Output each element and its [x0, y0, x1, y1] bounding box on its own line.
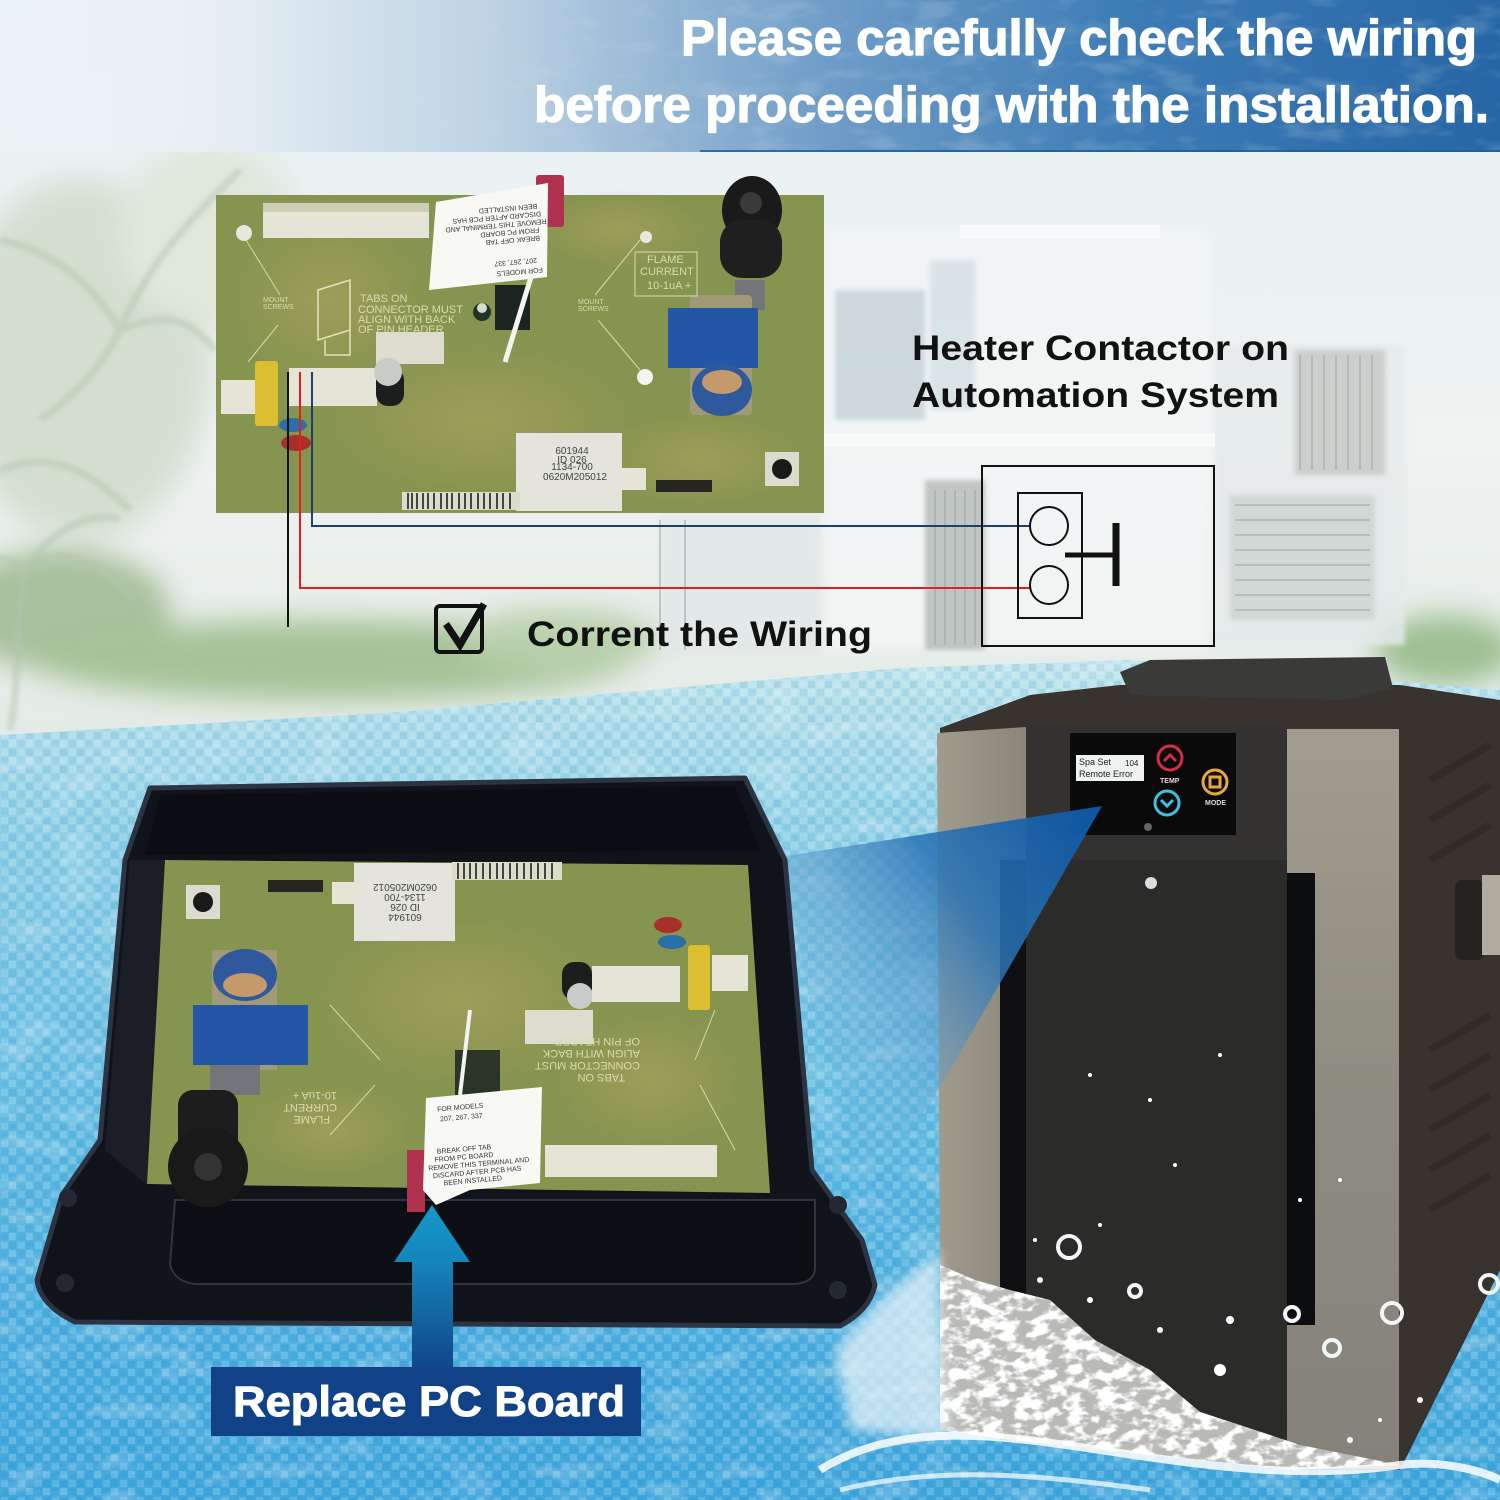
- left silver panel: [937, 727, 1026, 1300]
- tag lower: BREAK OFF TAB: [437, 1144, 492, 1156]
- small capacitors: [473, 285, 530, 330]
- side connector: [1455, 875, 1500, 960]
- screw posts: [56, 1189, 847, 1299]
- tag lower: 207, 267, 337: [440, 1113, 483, 1123]
- sticker lower: ID 026: [390, 901, 420, 912]
- wire lower: [460, 1010, 470, 1095]
- button labels: TEMP: [1160, 778, 1180, 785]
- paper tag: 207, 267, 337: [494, 256, 537, 267]
- label box: replace pc board: [211, 1367, 641, 1436]
- lower board printed text: CURRENT: [283, 1101, 337, 1113]
- paper tag: BEEN INSTALLED: [478, 202, 537, 214]
- control bezel: [1026, 726, 1287, 862]
- sticker: 0620M205012: [543, 472, 607, 483]
- blue and red capacitors: [279, 418, 311, 451]
- droplets: [1033, 1053, 1423, 1443]
- lower board printed text: 10-1uA +: [293, 1089, 337, 1101]
- background: sky: [0, 0, 1500, 740]
- fuse lower: [688, 945, 710, 1010]
- background: swimming pool: [0, 660, 1500, 1500]
- lower board printed text: TABS ON: [577, 1071, 625, 1083]
- pin header connectors: [221, 332, 444, 414]
- red tab: [536, 175, 564, 227]
- mount guide lines lower: [330, 1005, 735, 1150]
- tag lower: FOR MODELS: [437, 1103, 484, 1114]
- board printed text: ALIGN WITH BACK: [358, 314, 456, 326]
- recess: [170, 1200, 815, 1284]
- board printed text: SCREWS: [578, 306, 609, 313]
- title: Please carefully check the wiring: [681, 10, 1477, 66]
- door: [1000, 860, 1287, 1440]
- arrow: [394, 1205, 470, 1375]
- lower board printed text: ALIGN WITH BACK: [542, 1047, 640, 1059]
- right silver frame: [1287, 729, 1399, 1469]
- icon: checkbox: [436, 604, 484, 652]
- barcode: [402, 492, 520, 510]
- board printed text: FLAME: [647, 254, 684, 266]
- lower board: [147, 860, 770, 1193]
- background: villa: [660, 230, 1405, 655]
- connectors lower: [525, 955, 748, 1177]
- barcode lower: [452, 862, 562, 880]
- lower board printed text: [283, 1035, 640, 1125]
- pin row lower: [268, 880, 323, 892]
- main capacitor: [374, 358, 404, 406]
- body: [940, 685, 1500, 1470]
- small connector lower: [332, 882, 354, 904]
- vents: [1430, 745, 1490, 1210]
- capacitor lower: [562, 962, 593, 1009]
- heading: heater contactor: Automation System: [912, 376, 1279, 415]
- water splash: [820, 1053, 1500, 1490]
- pin row: [656, 480, 712, 492]
- sticker: 1134-700: [551, 462, 593, 473]
- display: [1076, 755, 1144, 781]
- board printed text: TABS ON: [360, 293, 408, 305]
- tag lower: BEEN INSTALLED: [443, 1175, 502, 1187]
- red and blue parts lower: [654, 917, 686, 949]
- red tab lower: [407, 1150, 425, 1212]
- paper tag: FROM PC BOARD: [480, 226, 540, 238]
- paper tag: FOR MODELS: [496, 266, 543, 277]
- wire: [505, 277, 531, 362]
- push button: [765, 452, 799, 486]
- fuse: [255, 361, 278, 426]
- small components lower: [455, 1050, 500, 1095]
- board printed text: OF PIN HEADER: [358, 324, 444, 336]
- panel: lower PC board housing: [37, 778, 875, 1326]
- board printed text: SCREWS: [263, 304, 294, 311]
- tag lower: DISCARD AFTER PCB HAS: [433, 1165, 522, 1180]
- small connector: [622, 468, 646, 490]
- tag lower: [423, 1087, 542, 1205]
- board printed text: CONNECTOR MUST: [358, 304, 463, 316]
- sticker lower: 1134-700: [384, 891, 426, 902]
- contactor diagram: [982, 466, 1214, 646]
- button labels: MODE: [1205, 800, 1226, 807]
- banner: [158, 0, 1500, 152]
- lid: [1120, 657, 1393, 700]
- lower board printed text: FLAME: [293, 1113, 330, 1125]
- board printed text: MOUNT: [263, 297, 289, 304]
- label box: replace pc board: Replace PC Board: [233, 1378, 625, 1426]
- title: before proceeding with the installation.: [534, 77, 1489, 133]
- transformer: [668, 280, 765, 416]
- transformer lower: [193, 949, 308, 1095]
- board printed text: [263, 254, 694, 336]
- sticker lower: 601944: [388, 911, 422, 922]
- title: [534, 10, 1489, 133]
- mount screw guide lines: [246, 240, 640, 370]
- sticker lower: 0620M205012: [373, 881, 437, 892]
- label: correct the wiring: Corrent the Wiring: [527, 615, 872, 654]
- board printed text: CURRENT: [640, 266, 694, 278]
- sticker: ID 026: [557, 455, 587, 466]
- display: Remote Error: [1079, 769, 1133, 779]
- housing body: [37, 778, 875, 1326]
- sticker lower: [354, 863, 455, 941]
- panel: upper PC board: [216, 175, 824, 513]
- left inner wall: [105, 860, 165, 1185]
- lower board printed text: CONNECTOR MUST: [535, 1059, 640, 1071]
- panel: heater unit: [937, 657, 1500, 1470]
- button labels: [1160, 778, 1226, 807]
- top connector strip: [263, 203, 429, 238]
- background: palm trees and garden: [0, 140, 1500, 730]
- capacitor tower: [720, 176, 782, 278]
- lower board printed text: OF PIN HEADER: [554, 1035, 640, 1047]
- wiring lines: [288, 372, 1030, 627]
- light beam: [780, 806, 1102, 1170]
- paper tag: REMOVE THIS TERMINAL AND: [445, 217, 547, 233]
- cylinder lower: [168, 1090, 248, 1207]
- sticker: 601944: [555, 446, 589, 457]
- glossy top wall: [145, 786, 760, 855]
- right slot: [1287, 873, 1315, 1325]
- connector diagram outline: [318, 280, 350, 355]
- tag lower: REMOVE THIS TERMINAL AND: [428, 1157, 530, 1173]
- paper tag: BREAK OFF TAB: [485, 234, 540, 245]
- display: 104: [1125, 759, 1139, 768]
- bubbles: [1058, 1236, 1498, 1356]
- button lower: [186, 885, 220, 919]
- board printed text: 10-1uA +: [647, 280, 691, 292]
- buttons: [1155, 746, 1227, 815]
- heading: heater contactor: [912, 329, 1289, 415]
- paper tag: DISCARD AFTER PCB HAS: [452, 209, 541, 224]
- heading: heater contactor: Heater Contactor on: [912, 329, 1289, 368]
- sticker: [516, 433, 622, 511]
- board printed text: MOUNT: [578, 299, 604, 306]
- tag lower: FROM PC BOARD: [434, 1152, 494, 1164]
- display: Spa Set: [1079, 757, 1112, 767]
- flame box: [635, 252, 697, 296]
- paper tag: [429, 183, 551, 290]
